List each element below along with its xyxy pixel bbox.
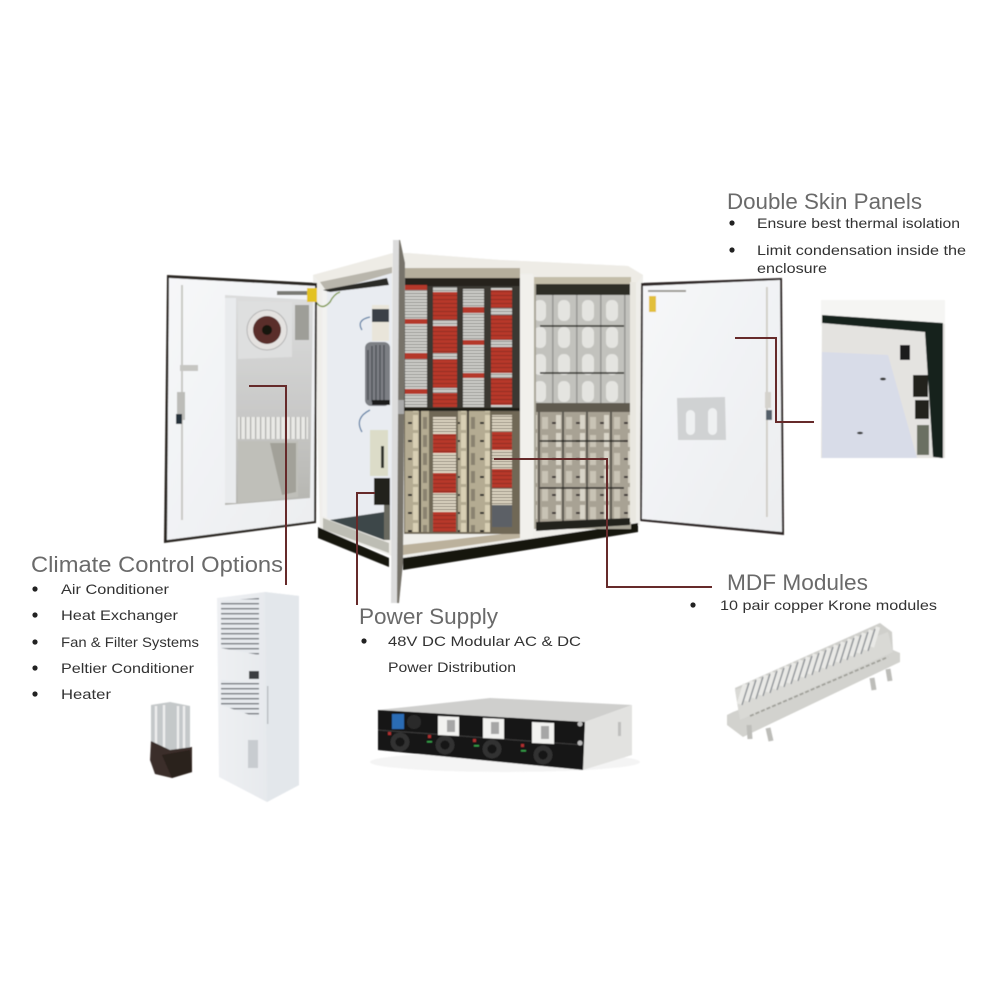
climate control block: [31, 552, 299, 802]
power supply list: [361, 633, 581, 675]
right bay rack: [534, 277, 636, 531]
cabinet photo: [164, 240, 784, 603]
climate control list: Air Conditioner: [61, 581, 169, 597]
double skin panel photo: [821, 300, 945, 458]
climate control list: Fan & Filter Systems: [61, 634, 199, 650]
double skin list: Ensure best thermal isolation: [757, 215, 960, 231]
MDF modules block: [690, 570, 937, 741]
climate control list: Heat Exchanger: [61, 607, 178, 623]
left door: [164, 275, 317, 543]
MDF modules heading: MDF Modules: [727, 570, 868, 595]
power supply list: 48V DC Modular AC & DC: [388, 633, 581, 649]
icon: power distribution unit: [370, 698, 640, 772]
power supply heading: Power Supply: [359, 604, 499, 629]
power supply list: Power Distribution: [388, 659, 516, 675]
air conditioner panel: [225, 291, 313, 505]
front door edge: [391, 240, 405, 603]
climate control list: [32, 581, 199, 702]
double skin list: Limit condensation inside the: [757, 242, 966, 258]
leader lines: [249, 338, 814, 605]
cabinet body: [313, 253, 643, 570]
central pillar: [520, 274, 533, 538]
power supply block: [359, 604, 640, 772]
climate control list: Peltier Conditioner: [61, 660, 194, 676]
icon: air conditioner unit: [217, 592, 299, 802]
climate control list: Heater: [61, 686, 111, 702]
icon: Krone module: [727, 623, 900, 741]
double skin panels block: [727, 189, 966, 276]
upper module columns: [405, 285, 512, 407]
double skin list: enclosure: [757, 260, 827, 276]
right door: [640, 278, 784, 535]
double skin heading: Double Skin Panels: [727, 189, 922, 214]
icon: heater: [150, 702, 192, 778]
centre bay MDF rack: [404, 268, 520, 534]
MDF modules list: 10 pair copper Krone modules: [720, 597, 937, 613]
double skin list: [729, 215, 966, 276]
left bay interior: [316, 267, 392, 540]
climate control heading: Climate Control Options: [31, 552, 283, 577]
lower module columns: [404, 408, 520, 534]
